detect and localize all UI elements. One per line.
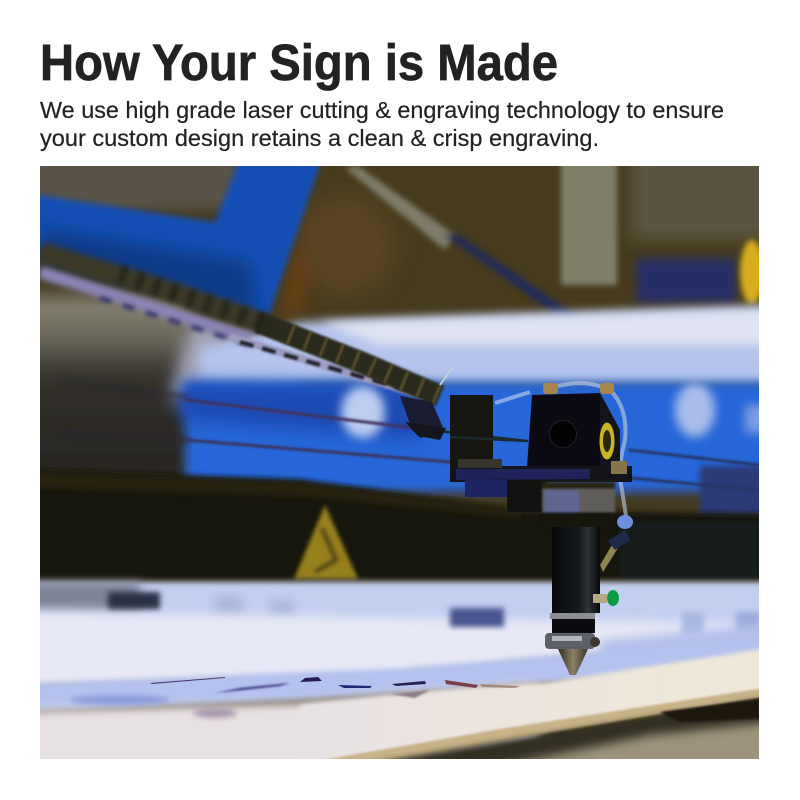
tube clamp	[611, 461, 627, 474]
subtitle text	[40, 97, 724, 151]
cables	[162, 390, 759, 492]
photo: laser cutting machine	[40, 166, 759, 759]
subtitle text: your custom design retains a clean & crisp engraving.	[40, 125, 599, 151]
laser warning label	[600, 422, 614, 460]
brass fittings	[543, 383, 614, 394]
title: How Your Sign is Made	[40, 34, 558, 91]
lens housing	[540, 482, 617, 515]
warning triangle sign	[294, 505, 358, 579]
nozzle collar	[550, 613, 595, 619]
blurred table and lit blue panel	[0, 296, 800, 516]
blurred workshop background	[40, 166, 759, 320]
blurred machine bed	[20, 582, 780, 712]
laser head	[450, 383, 633, 675]
air fitting	[600, 515, 633, 572]
cable pass-through	[450, 437, 527, 441]
aperture	[550, 420, 576, 448]
mounting bracket	[450, 395, 493, 467]
clear air tube	[495, 383, 626, 516]
drag chain underside	[40, 272, 425, 396]
wooden sheet being engraved	[40, 648, 759, 759]
drag chain	[40, 252, 440, 396]
engraved marks	[70, 677, 520, 718]
subtitle text: We use high grade laser cutting & engraving technology to ensure	[40, 97, 724, 123]
mounting plate	[450, 466, 632, 482]
mirror block	[527, 393, 620, 467]
chain end bracket	[400, 368, 452, 440]
black machine beam	[30, 470, 770, 580]
silver ring	[545, 633, 595, 649]
nozzle tip	[558, 649, 588, 675]
green knob	[593, 590, 619, 606]
nozzle barrel	[552, 527, 600, 613]
lower bracket	[465, 480, 507, 497]
